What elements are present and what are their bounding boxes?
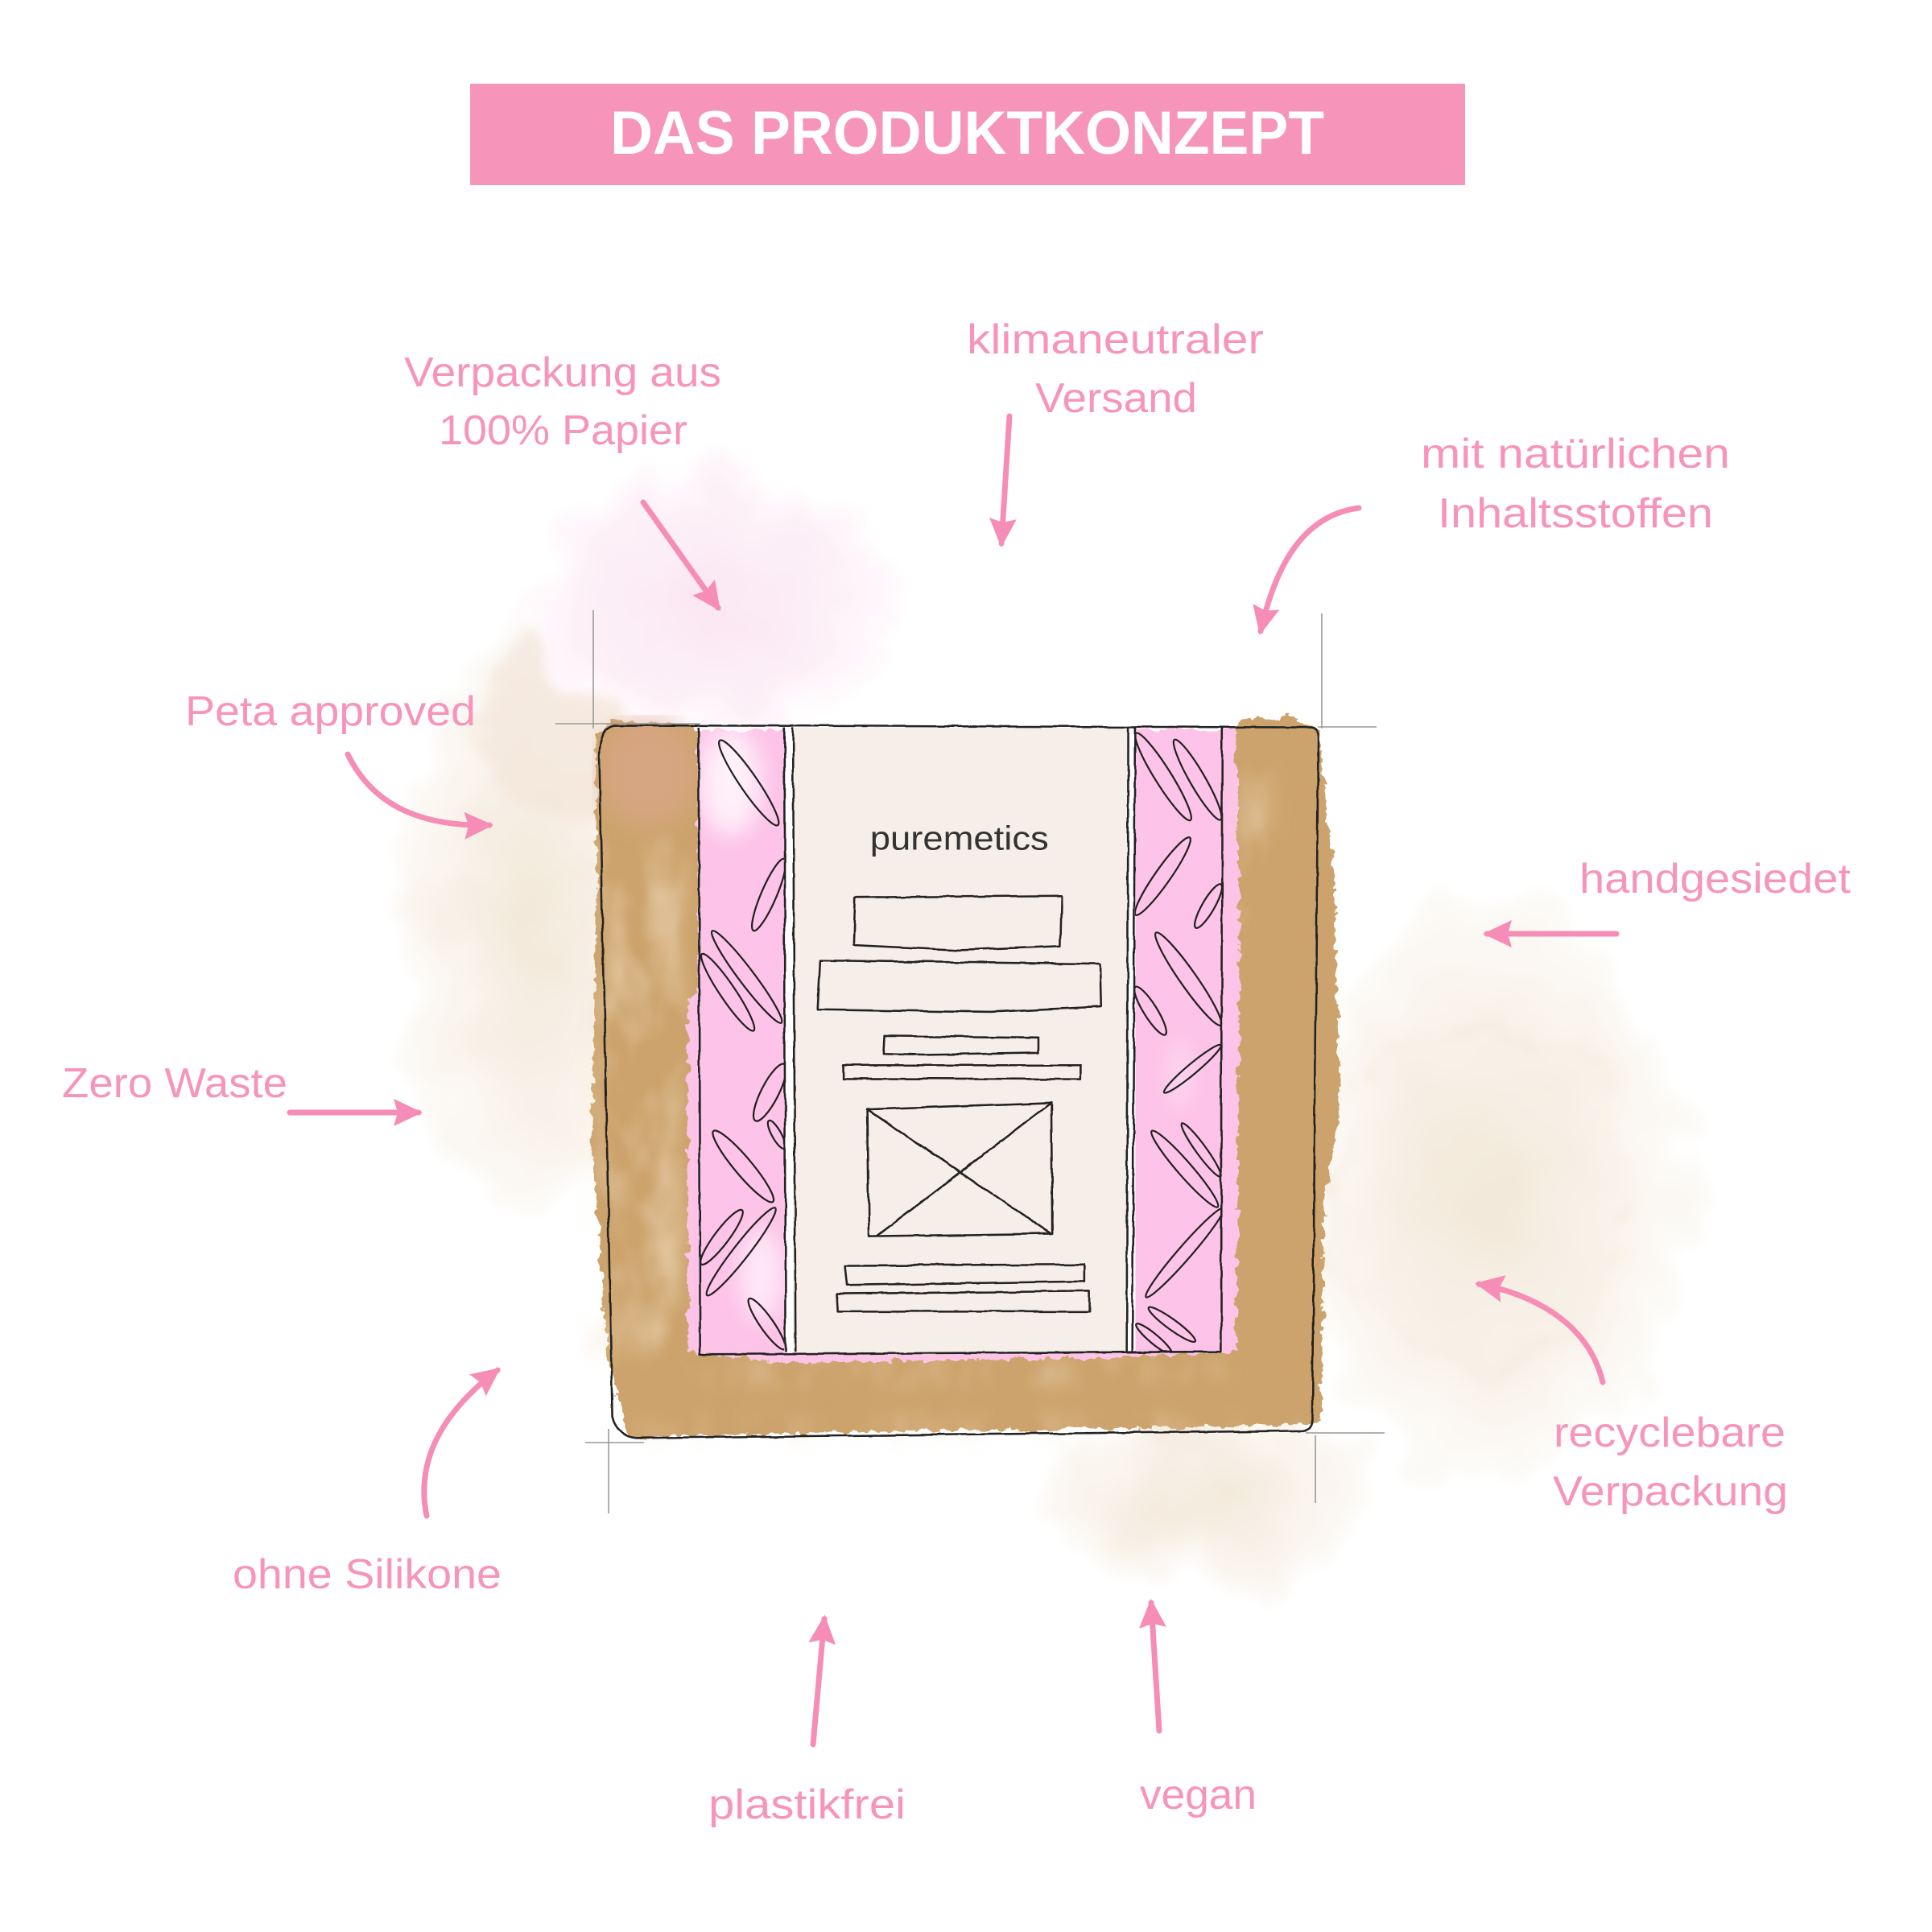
arrow: vegan (1151, 1603, 1159, 1731)
arrow: plastikfrei (813, 1619, 824, 1744)
label: recyclebare Verpackung: recyclebare (1554, 1410, 1785, 1456)
arrow: Inhaltsstoffe (1261, 508, 1359, 631)
title banner (470, 84, 1465, 185)
arrow: Peta (348, 754, 489, 825)
arrow: Verpackung (643, 502, 718, 608)
label: recyclebare Verpackung: Verpackung (1553, 1468, 1788, 1515)
kraft paper frame (592, 716, 1340, 1438)
label: Zero Waste: Zero Waste (62, 1060, 287, 1107)
pink inner tray (679, 729, 1246, 1366)
label: Verpackung aus 100% Papier: 100% Papier (439, 407, 687, 454)
label: mit natürlichen Inhaltsstoffen: mit natürlichen (1421, 431, 1730, 477)
left leaf pattern (700, 739, 784, 1351)
frame tint at top left (600, 717, 697, 825)
label: Verpackung aus 100% Papier (404, 349, 721, 454)
frame mottling on left column and bottom band (594, 746, 1308, 1434)
arrow: recyclebar (1479, 1284, 1603, 1382)
watercolor washes behind the box (398, 471, 1690, 1598)
label: klimaneutraler Versand: klimaneutraler (967, 316, 1264, 363)
illustration: product box (592, 716, 1340, 1438)
label: vegan: vegan (1140, 1772, 1257, 1818)
label: Peta approved: Peta approved (185, 688, 476, 735)
arrow: handgesiedet (1487, 931, 1616, 937)
brand name on label: puremetics (870, 819, 1049, 857)
label: klimaneutraler Versand: Versand (1035, 375, 1197, 422)
sketch outlines (600, 725, 1319, 1438)
crop guide lines (555, 610, 1385, 1513)
arrow: Silikone (424, 1370, 497, 1516)
label: recyclebare Verpackung (1553, 1410, 1788, 1515)
label: mit natürlichen Inhaltsstoffen: Inhaltsstoffen (1438, 490, 1713, 537)
white washes on pink (700, 728, 1190, 1321)
label: ohne Silikone: ohne Silikone (233, 1551, 502, 1598)
right leaf pattern (1135, 732, 1222, 1352)
arrow: Zero Waste (290, 1109, 419, 1116)
label: mit natürlichen Inhaltsstoffen (1421, 431, 1730, 537)
title banner: DAS PRODUKTKONZEPT (610, 99, 1324, 167)
arrow: Versand (1001, 416, 1009, 543)
label: handgesiedet: handgesiedet (1579, 856, 1852, 902)
label: klimaneutraler Versand (967, 316, 1264, 422)
label: plastikfrei: plastikfrei (708, 1781, 906, 1828)
centre label panel (786, 728, 1136, 1352)
label: Verpackung aus 100% Papier: Verpackung aus (404, 349, 721, 396)
